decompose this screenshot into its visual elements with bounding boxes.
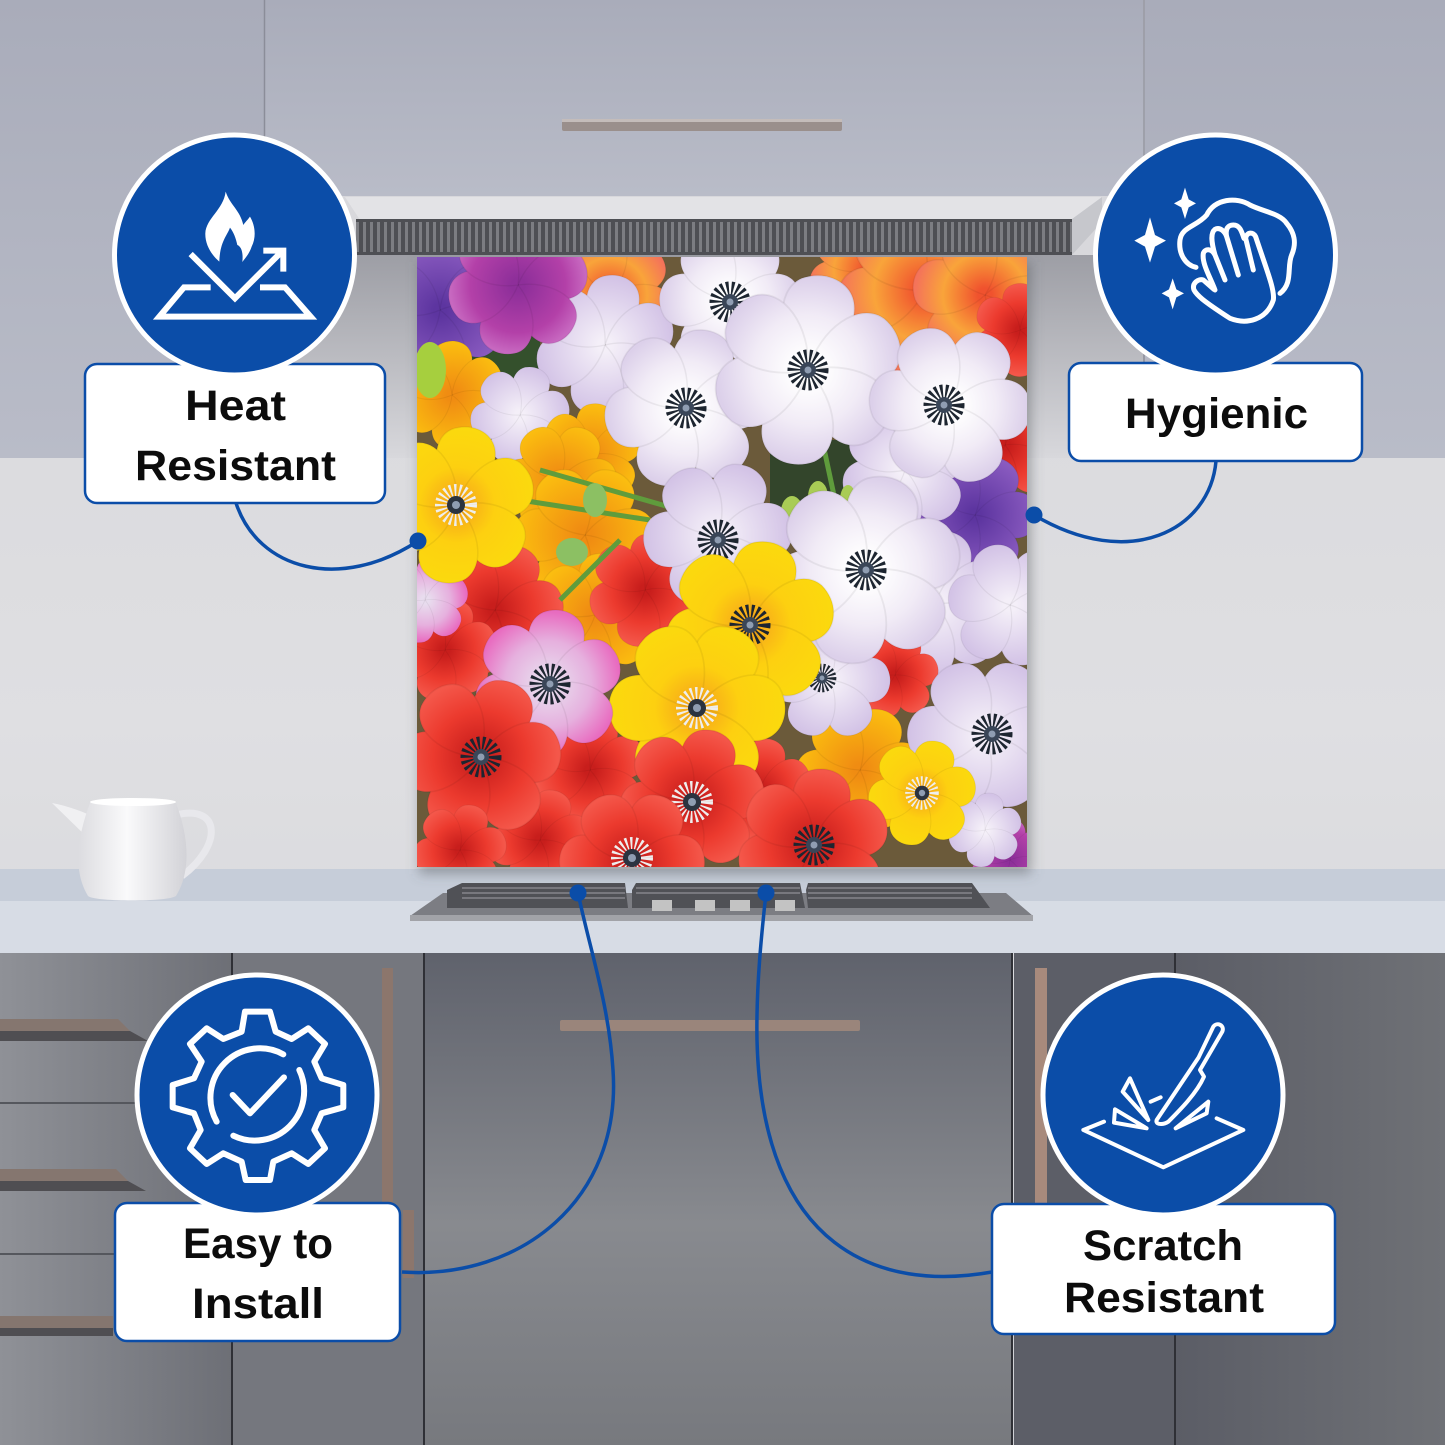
cabinet seams: [264, 0, 1144, 458]
icon: gear with check mark: [173, 1012, 343, 1180]
door handle right: [1035, 968, 1047, 1204]
label box: heat resistant: [85, 364, 385, 503]
yellow flowers: [362, 413, 994, 863]
teapot: [52, 798, 211, 900]
cabinet ledges: [0, 458, 1445, 478]
upper cabinet centre: [265, 0, 1143, 196]
label box: scratch resistant: Resistant: [1064, 1274, 1264, 1322]
icon badge: scratch resistant: [1043, 975, 1283, 1215]
label box: heat resistant: Resistant: [135, 442, 336, 490]
icon badge: hygienic: [1096, 135, 1336, 375]
panel shadow: [419, 262, 1031, 874]
upper cabinet left: [0, 0, 264, 458]
cooker hood: [345, 197, 1102, 255]
worktop: [0, 901, 1445, 953]
label box: heat resistant: Heat: [185, 382, 286, 430]
icon: hand wiping with sparkles: [1134, 188, 1294, 321]
upper cabinet right: [1145, 0, 1445, 458]
label box: easy to install: Easy to: [183, 1220, 333, 1268]
connector: heat resistant: [236, 503, 426, 569]
door handle centre: [560, 1020, 860, 1031]
floral splashback panel: [417, 257, 1027, 867]
connector: easy to install: [402, 884, 614, 1273]
label box: hygienic: [1069, 363, 1362, 461]
lower cabinets: [0, 953, 1445, 1445]
label box: scratch resistant: Scratch: [1083, 1222, 1243, 1270]
counter upstand: [0, 869, 1445, 901]
background foliage and blooms: [417, 257, 1027, 867]
cabinet handle: [562, 119, 842, 131]
label box: easy to install: [115, 1203, 400, 1341]
connector: scratch resistant: [757, 884, 992, 1276]
red and pink flowers: [417, 610, 888, 867]
gas hob: [410, 883, 1033, 921]
white and lilac flowers: [604, 257, 1027, 867]
icon badge: heat resistant: [114, 135, 354, 375]
drawer handles: [0, 1019, 130, 1328]
label box: hygienic: Hygienic: [1125, 390, 1308, 438]
icon: knife scratching a surface: [1083, 1024, 1243, 1167]
connector: hygienic: [1026, 461, 1216, 542]
label box: scratch resistant: [992, 1204, 1335, 1334]
door handle left: [382, 968, 414, 1278]
icon badge: easy to install: [137, 975, 377, 1215]
label box: easy to install: Install: [192, 1280, 324, 1328]
icon: flame over surface: [159, 192, 311, 317]
